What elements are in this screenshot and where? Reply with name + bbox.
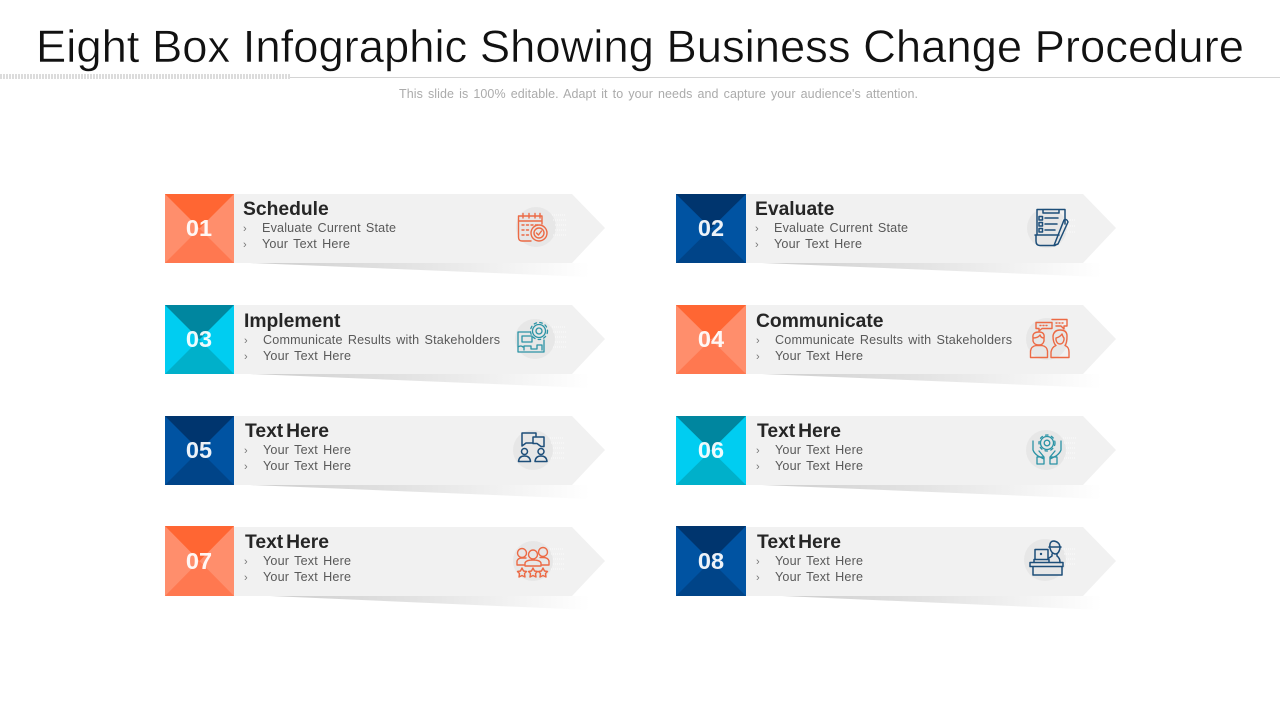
number box 03: 03: [186, 326, 212, 352]
title: Eight Box Infographic Showing Business Change Procedure: [36, 21, 1244, 72]
bullet list: [244, 333, 500, 363]
number box 05: 05: [186, 437, 212, 463]
bullet list: ›: [244, 351, 248, 363]
header rule: [0, 74, 1280, 79]
panel: 06 Text Here: [676, 416, 1116, 499]
bullet list: ›: [243, 223, 247, 235]
bullet list: ›: [756, 335, 760, 347]
icon: blueprint and gear: [515, 319, 566, 359]
panel: 04 Communicate: [676, 305, 1116, 388]
heading: Text Here: [757, 532, 841, 553]
icon: people in discussion: [513, 430, 564, 470]
bullet list: Your Text Here: [263, 443, 351, 457]
bullet list: Your Text Here: [263, 349, 351, 363]
number box 01: 01: [186, 215, 212, 241]
bullet list: Your Text Here: [262, 237, 350, 251]
bullet list: [756, 554, 863, 584]
bullet list: ›: [244, 556, 248, 568]
bullet list: ›: [755, 223, 759, 235]
bullet list: Your Text Here: [775, 459, 863, 473]
number box 04: 04: [698, 326, 724, 352]
bullet list: ›: [244, 572, 248, 584]
number box 07: 07: [186, 548, 212, 574]
heading: Implement: [244, 311, 341, 332]
icon: person at laptop desk: [1024, 539, 1076, 581]
subtitle: This slide is 100% editable. Adapt it to your needs and capture your audience's attention.: [399, 87, 918, 101]
bullet list: ›: [756, 556, 760, 568]
number box 06: 06: [698, 437, 724, 463]
icon: calendar and clock: [516, 207, 566, 247]
bullet list: Your Text Here: [775, 554, 863, 568]
icon: team and stars: [513, 541, 564, 581]
bullet list: ›: [756, 461, 760, 473]
bullet list: [244, 443, 351, 473]
panel: 03 Implement: [165, 305, 605, 388]
bullet list: ›: [755, 239, 759, 251]
bullet list: Your Text Here: [775, 570, 863, 584]
bullet list: Your Text Here: [263, 459, 351, 473]
bullet list: [756, 333, 1012, 363]
number box 06: [676, 416, 746, 485]
bullet list: ›: [244, 335, 248, 347]
heading: Text Here: [245, 421, 329, 442]
number box 05: [165, 416, 234, 485]
bullet list: ›: [244, 445, 248, 457]
bullet list: ›: [756, 351, 760, 363]
bullet list: Your Text Here: [263, 570, 351, 584]
heading: Evaluate: [755, 199, 835, 220]
bullet list: [243, 221, 396, 251]
bullet list: ›: [756, 445, 760, 457]
heading: Communicate: [756, 311, 884, 332]
bullet list: Communicate Results with Stakeholders: [263, 333, 500, 347]
bullet list: ›: [243, 239, 247, 251]
panel: 02 Evaluate: [676, 194, 1116, 277]
heading: Text Here: [245, 532, 329, 553]
panel: 05 Text Here: [165, 416, 605, 499]
panel: 08 Text Here: [676, 526, 1116, 610]
icon: checklist clipboard: [1027, 208, 1076, 248]
heading: Schedule: [243, 199, 329, 220]
bullet list: Evaluate Current State: [774, 221, 908, 235]
bullet list: Your Text Here: [774, 237, 862, 251]
bullet list: Your Text Here: [775, 443, 863, 457]
panel: 01 Schedule: [165, 194, 605, 277]
number box 07: [165, 526, 234, 596]
heading: Text Here: [757, 421, 841, 442]
number box 02: 02: [698, 215, 724, 241]
number box 03: [165, 305, 234, 374]
bullet list: Evaluate Current State: [262, 221, 396, 235]
icon: hands holding gear: [1026, 430, 1076, 470]
number box 02: [676, 194, 746, 263]
bullet list: [755, 221, 908, 251]
bullet list: [244, 554, 351, 584]
bullet list: ›: [244, 461, 248, 473]
number box 08: [676, 526, 746, 596]
bullet list: [756, 443, 863, 473]
panel: 07 Text Here: [165, 526, 605, 610]
number box 08: 08: [698, 548, 724, 574]
bullet list: Your Text Here: [775, 349, 863, 363]
number box 04: [676, 305, 746, 374]
bullet list: Communicate Results with Stakeholders: [775, 333, 1012, 347]
icon: two people talking: [1026, 318, 1069, 360]
number box 01: [165, 194, 234, 263]
bullet list: ›: [756, 572, 760, 584]
bullet list: Your Text Here: [263, 554, 351, 568]
